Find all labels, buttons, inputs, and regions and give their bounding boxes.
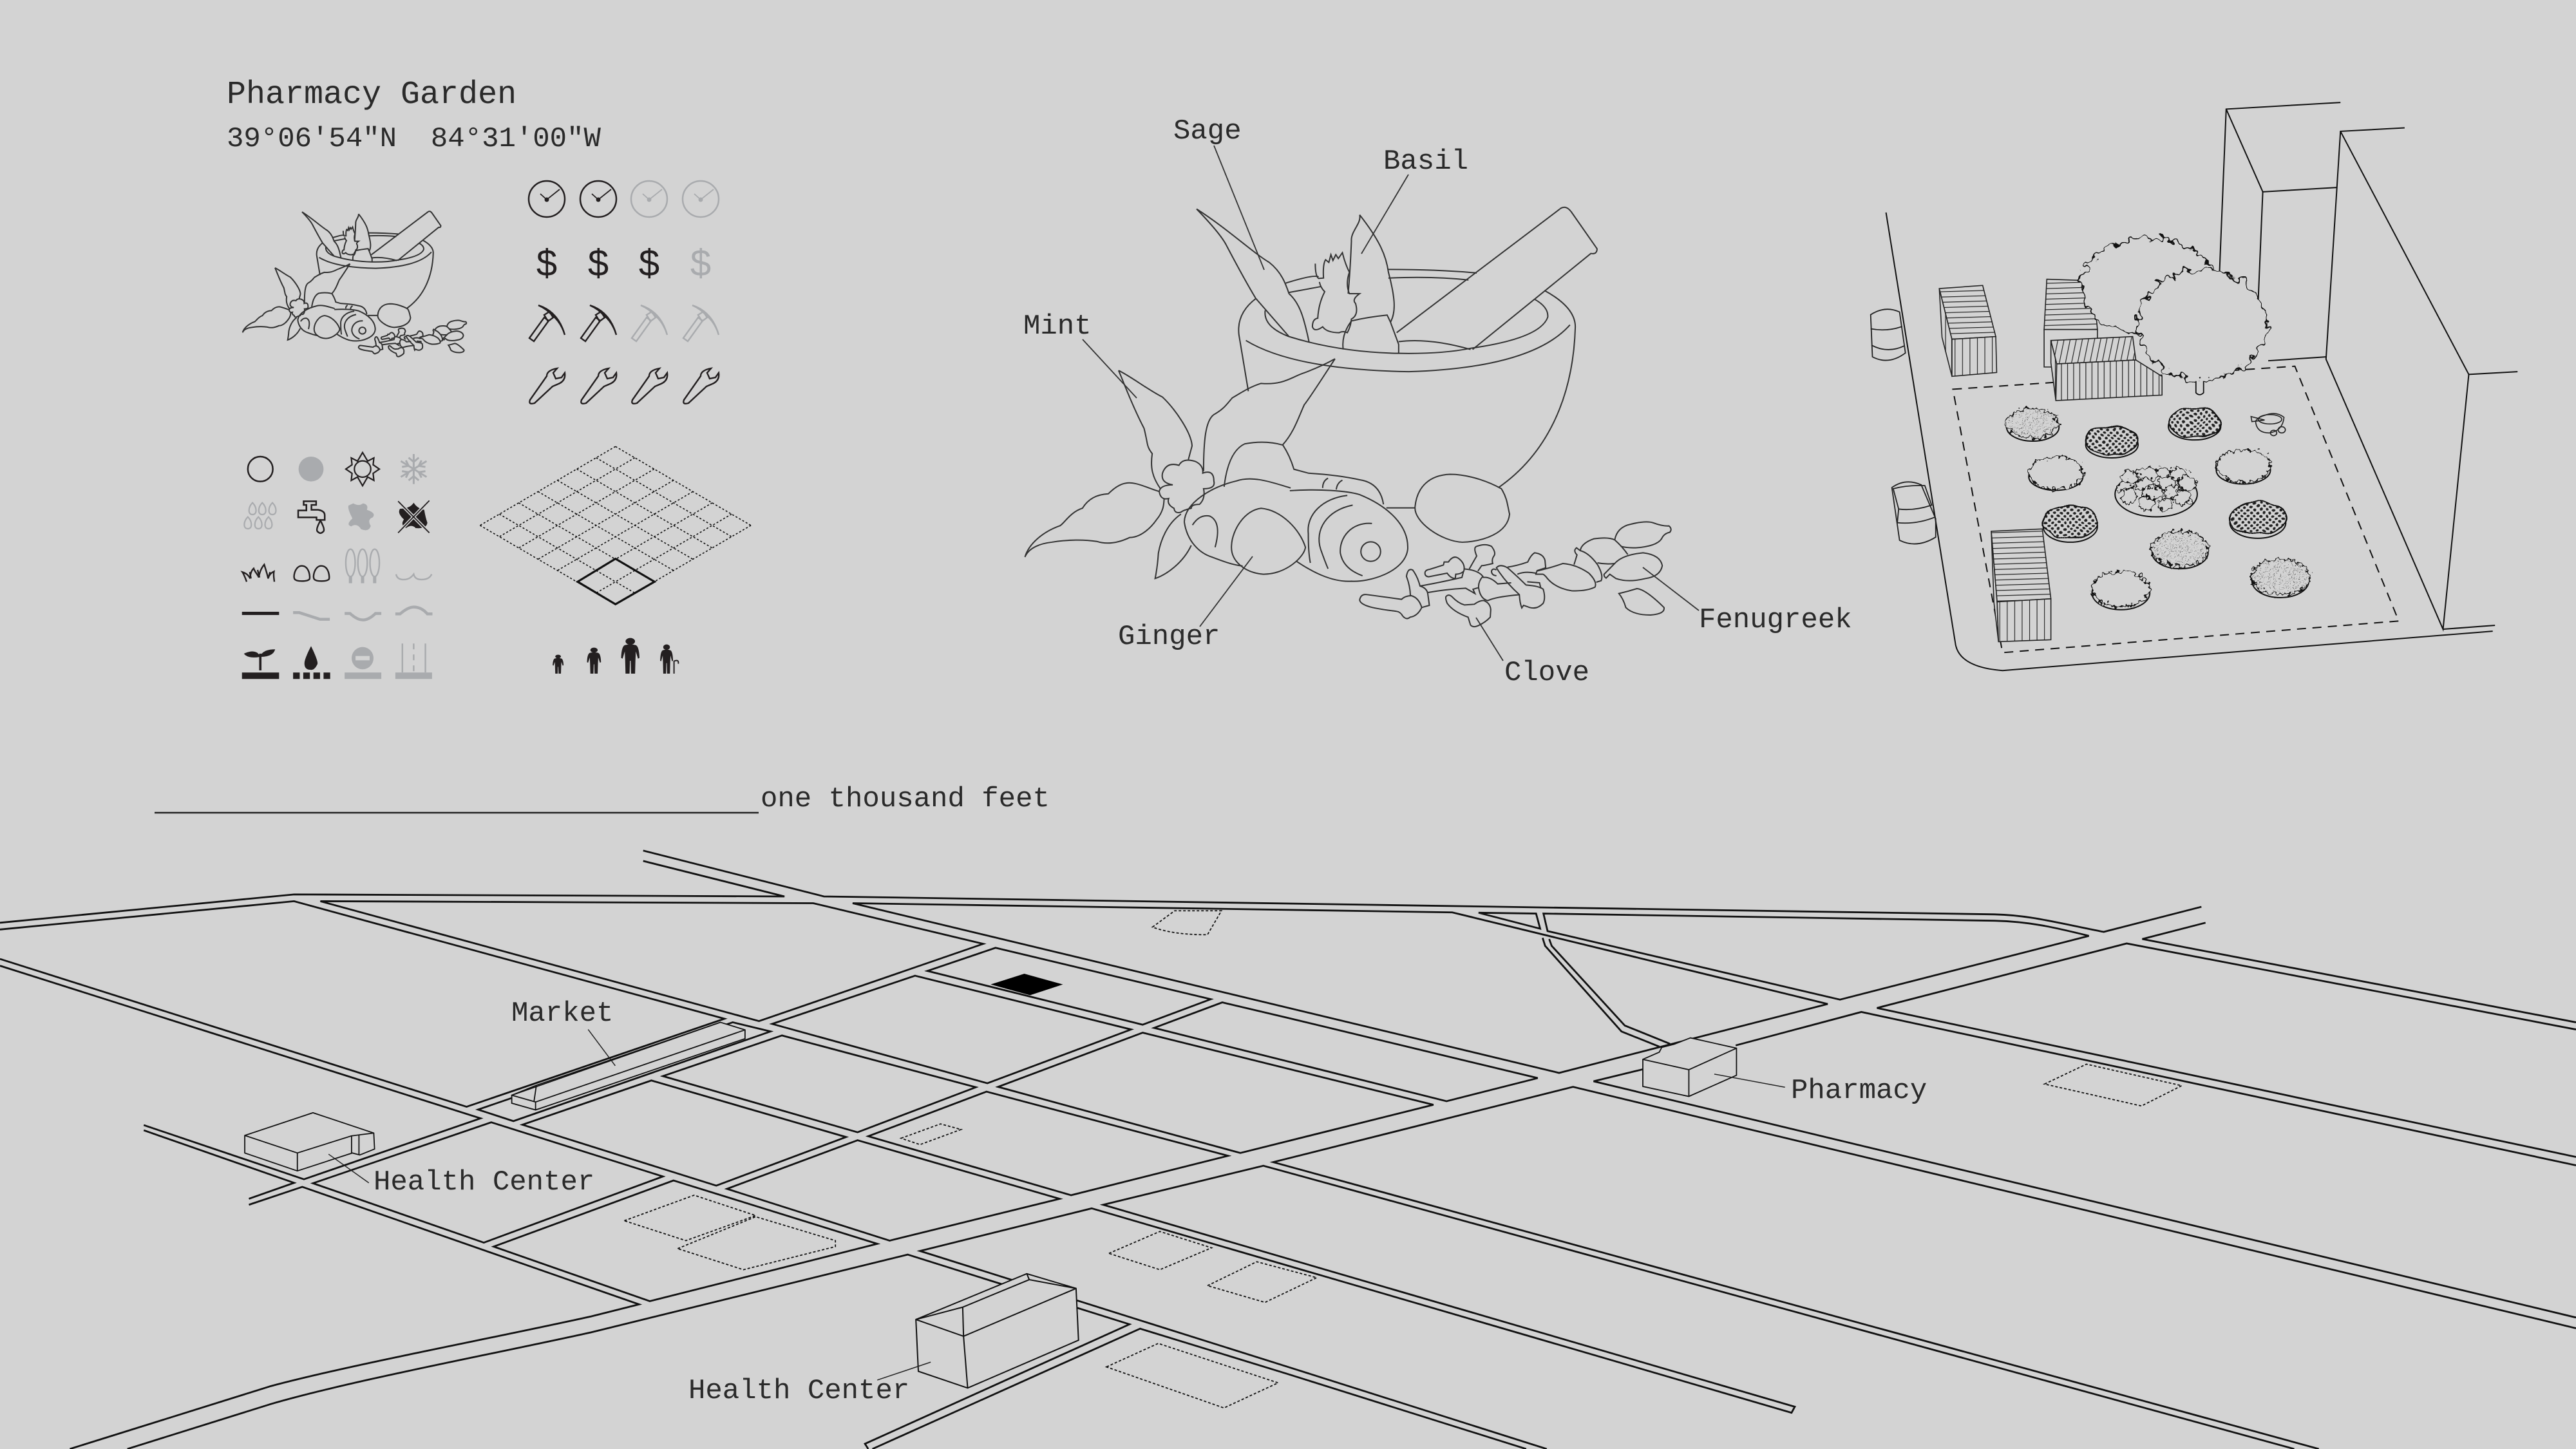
icon: grass: [242, 565, 274, 582]
label: Fenugreek: Fenugreek: [1699, 604, 1852, 636]
dotted isometric plot grid: [480, 446, 751, 604]
icon grid: time, cost, labor, maintenance ratings: [529, 181, 719, 404]
label: Sage: [1173, 115, 1264, 270]
icon: trees: [346, 549, 379, 583]
label: Clove: [1476, 618, 1589, 689]
cars: [1871, 309, 1936, 544]
building: market: [512, 1022, 745, 1110]
icon: grey circle: [299, 457, 323, 482]
icon: empty circle: [248, 457, 273, 482]
icon: no entry: [345, 647, 381, 679]
label: Fenugreek: [1643, 567, 1852, 636]
icon: sloped terrain: [293, 612, 330, 620]
leader lines: [328, 1030, 1785, 1380]
icon: flat terrain: [242, 612, 279, 615]
icon row: dollar signs: $: [588, 242, 609, 284]
label: Clove: Clove: [1504, 657, 1589, 689]
label: Mint: Mint: [1023, 310, 1092, 343]
icon: sun: [346, 453, 379, 486]
shed long: [2051, 337, 2162, 401]
icon: drop over drainage: [293, 646, 330, 679]
shed front: [1991, 529, 2051, 641]
miniature mortar in garden: [2251, 413, 2286, 436]
planting beds: dotted: [2043, 408, 2286, 538]
planting bed plates: [2007, 413, 2309, 610]
icon row: pickaxes: [529, 305, 719, 341]
garden axonometric drawing: [1871, 102, 2517, 670]
icon grid: growing conditions: [242, 446, 751, 679]
icon: grey blob: [348, 504, 374, 530]
icon: water waves: [396, 574, 431, 580]
coordinates: 39°06′54″N 84°31′00″W: [227, 123, 601, 155]
icon row: clocks: [529, 181, 719, 217]
street map: [0, 851, 2576, 1449]
map labels: [374, 998, 1927, 1407]
icon: sprout on soil: [242, 649, 279, 679]
herb labels: [1023, 115, 1852, 689]
site lines and neighbouring buildings: [1886, 102, 2517, 670]
icon: crossed-out black blob: [398, 500, 430, 533]
icon: snowflake: [401, 454, 426, 484]
tree rear: [2080, 238, 2216, 336]
street network: [0, 851, 2576, 1449]
shed back centre: [2044, 279, 2098, 367]
icon: rain drops: [244, 503, 276, 529]
icon: water tap: [298, 501, 325, 533]
tree front: [2138, 269, 2266, 380]
building: south health center: [916, 1274, 1079, 1388]
icon: road: [395, 643, 432, 679]
building: pharmacy: [1643, 1038, 1736, 1097]
label: Mint: [1023, 310, 1137, 398]
label: Ginger: Ginger: [1118, 621, 1220, 653]
icon row: dollar signs: $: [536, 242, 557, 284]
icon row: wrenches: [529, 368, 719, 404]
icon row: dollar signs: [536, 242, 711, 284]
title: Pharmacy Garden: [227, 77, 516, 113]
label: Ginger: [1118, 556, 1253, 653]
central planting bed with leaves: [2117, 468, 2196, 511]
label: Sage: Sage: [1173, 115, 1242, 147]
highlighted plot square: [578, 559, 654, 604]
tree trunk: [2196, 381, 2204, 395]
dotted empty plots: [624, 911, 2182, 1408]
icons: people figures: [553, 638, 678, 674]
icon row: dollar signs: $: [639, 242, 659, 284]
illustration: mortar with herbs: [1025, 207, 1671, 627]
label: Basil: Basil: [1383, 146, 1468, 178]
icon row: dollar signs: $: [690, 242, 711, 284]
site marker: pharmacy garden plot: [990, 974, 1063, 995]
shed back left: [1939, 285, 1996, 376]
label: Health Center south: Health Center: [688, 1375, 909, 1407]
label: Basil: [1361, 146, 1468, 254]
label: Pharmacy: Pharmacy: [1791, 1075, 1927, 1107]
icon: valley terrain: [345, 614, 381, 620]
scale bar: one thousand feet: [761, 783, 1050, 815]
planting beds: plain: [2029, 450, 2271, 607]
garden boundary: [1953, 366, 2399, 652]
icon: shrubs: [294, 566, 329, 581]
label: Health Center west: Health Center: [374, 1166, 594, 1198]
icon: hill terrain: [395, 607, 432, 614]
label: Market: Market: [511, 998, 613, 1030]
planting beds: stippled: [2005, 408, 2310, 594]
building: west health center: [245, 1113, 375, 1171]
icon: small mortar and pestle: [243, 211, 466, 357]
